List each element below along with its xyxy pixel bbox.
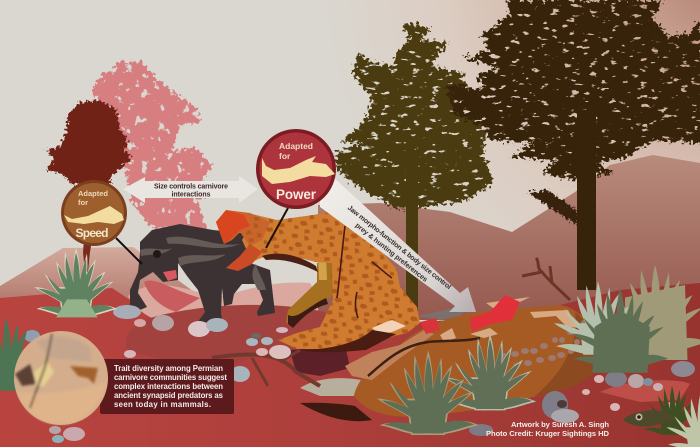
dog right bbox=[70, 366, 98, 384]
trunk bbox=[83, 240, 92, 272]
orange gorgonopsian bbox=[216, 205, 430, 355]
double arrow: size controls bbox=[123, 176, 258, 203]
fern: far left bbox=[0, 317, 50, 391]
khaki mass bbox=[625, 285, 688, 360]
crown bbox=[46, 100, 132, 184]
fern centre core bbox=[382, 356, 474, 433]
speed text: Speed bbox=[76, 226, 108, 240]
label: for bbox=[78, 198, 88, 207]
text panel bbox=[100, 359, 234, 414]
fern: left bbox=[34, 248, 118, 317]
central conifer bbox=[335, 23, 493, 325]
diagonal arrow: jaw morpho-function bbox=[320, 178, 476, 312]
credits: Photo Credit: Kruger Sightings HD bbox=[486, 429, 610, 438]
foliage bbox=[335, 23, 493, 210]
dry grass bbox=[36, 337, 92, 362]
grey rock slab bbox=[300, 378, 362, 396]
fern: middle bbox=[444, 333, 536, 410]
dark mass bbox=[592, 311, 650, 373]
fern: bottom centre bbox=[377, 350, 479, 435]
front paw bbox=[288, 298, 328, 328]
dark fern behind lizard bbox=[643, 386, 700, 435]
outer ring bbox=[256, 129, 336, 209]
inner disc bbox=[64, 183, 124, 243]
arrow label: prey & hunting preferences bbox=[354, 222, 428, 284]
fern: right bbox=[572, 288, 668, 373]
panel text: carnivore communities suggest bbox=[114, 373, 227, 382]
shaded side bbox=[535, 312, 599, 396]
belly shadow bbox=[262, 254, 318, 272]
red rise bbox=[126, 305, 345, 372]
pointer line: speed bbox=[116, 238, 142, 264]
far hills bbox=[318, 155, 700, 320]
pebbles bbox=[24, 305, 695, 443]
haunch wound bbox=[372, 320, 406, 334]
jaw icon bbox=[64, 206, 124, 224]
log and branches bbox=[212, 350, 320, 386]
panel text: seen today in mammals. bbox=[114, 400, 211, 409]
front leg bbox=[286, 263, 334, 328]
maroon hollow bbox=[290, 345, 350, 376]
dirt bbox=[18, 382, 106, 424]
label: Adapted bbox=[279, 141, 313, 151]
fern base bbox=[56, 299, 98, 317]
eye bbox=[153, 250, 161, 258]
leg highlight bbox=[318, 254, 327, 280]
photo disc bbox=[14, 331, 108, 425]
blood small bbox=[420, 318, 440, 334]
ground bbox=[0, 283, 700, 447]
spots bbox=[246, 212, 418, 349]
tan patches bbox=[530, 310, 578, 328]
body mound bbox=[354, 305, 599, 417]
lower jaw bbox=[226, 244, 262, 271]
panel text: ancient synapsid predators as bbox=[114, 391, 224, 400]
dark cavity bbox=[300, 403, 372, 421]
lizard bbox=[623, 410, 676, 427]
bright patch right bbox=[600, 380, 690, 402]
arrow label: interactions bbox=[172, 192, 211, 198]
arrow label: Jaw morpho-function & body size control bbox=[346, 205, 452, 291]
mouth bbox=[163, 270, 177, 281]
trunk bbox=[406, 150, 418, 325]
badge: power bbox=[256, 129, 336, 209]
trunk bbox=[577, 110, 596, 290]
dark red tree bbox=[46, 100, 132, 272]
rosy clearing under animals bbox=[128, 283, 318, 325]
fern middle core bbox=[448, 339, 532, 409]
power text: Power bbox=[276, 187, 317, 202]
dark blades bbox=[572, 288, 668, 368]
head bbox=[216, 210, 270, 246]
photo of wild dogs bbox=[14, 331, 108, 425]
pink tree bbox=[92, 62, 212, 240]
fern: right light bbox=[554, 281, 642, 355]
red snout bbox=[216, 210, 250, 244]
credits: Artwork by Suresh A. Singh bbox=[511, 420, 609, 429]
dog centre bbox=[34, 362, 54, 386]
large pine bbox=[447, 0, 700, 290]
ribs bbox=[500, 320, 589, 369]
torn hide bbox=[418, 304, 470, 320]
dog left bbox=[15, 364, 36, 386]
panel background bbox=[100, 359, 234, 414]
khaki blades bbox=[602, 265, 700, 352]
fern: bottom right bbox=[666, 395, 700, 447]
black gorgonopsian bbox=[130, 224, 275, 323]
fern: right khaki bbox=[602, 265, 700, 360]
crown bbox=[447, 0, 700, 180]
carcass bbox=[345, 295, 599, 417]
label: Adapted bbox=[78, 189, 108, 198]
badge: speed bbox=[61, 180, 127, 246]
pointer line: power bbox=[266, 208, 288, 248]
tail shadow bbox=[300, 330, 396, 352]
blood bbox=[470, 295, 520, 332]
fern blades bbox=[38, 253, 114, 316]
panel text: Trait diversity among Permian bbox=[114, 364, 223, 373]
inner disc bbox=[260, 132, 332, 206]
jaw icon bbox=[262, 156, 335, 184]
body bbox=[130, 224, 275, 323]
dead branch bbox=[522, 258, 570, 300]
left hill bbox=[0, 247, 205, 320]
label: for bbox=[279, 151, 291, 161]
pink patch bbox=[144, 281, 200, 312]
outer ring bbox=[61, 180, 127, 246]
small low branch bbox=[528, 190, 578, 226]
fern halo bbox=[34, 248, 118, 317]
body bbox=[242, 212, 420, 349]
stripes bbox=[140, 248, 172, 256]
branch bbox=[30, 334, 52, 408]
arrow label: Size controls carnivore bbox=[154, 184, 228, 190]
panel text: complex interactions between bbox=[114, 382, 223, 391]
dark wound line bbox=[368, 338, 480, 376]
peach limb bbox=[345, 330, 434, 380]
dark body lines bbox=[337, 226, 392, 318]
